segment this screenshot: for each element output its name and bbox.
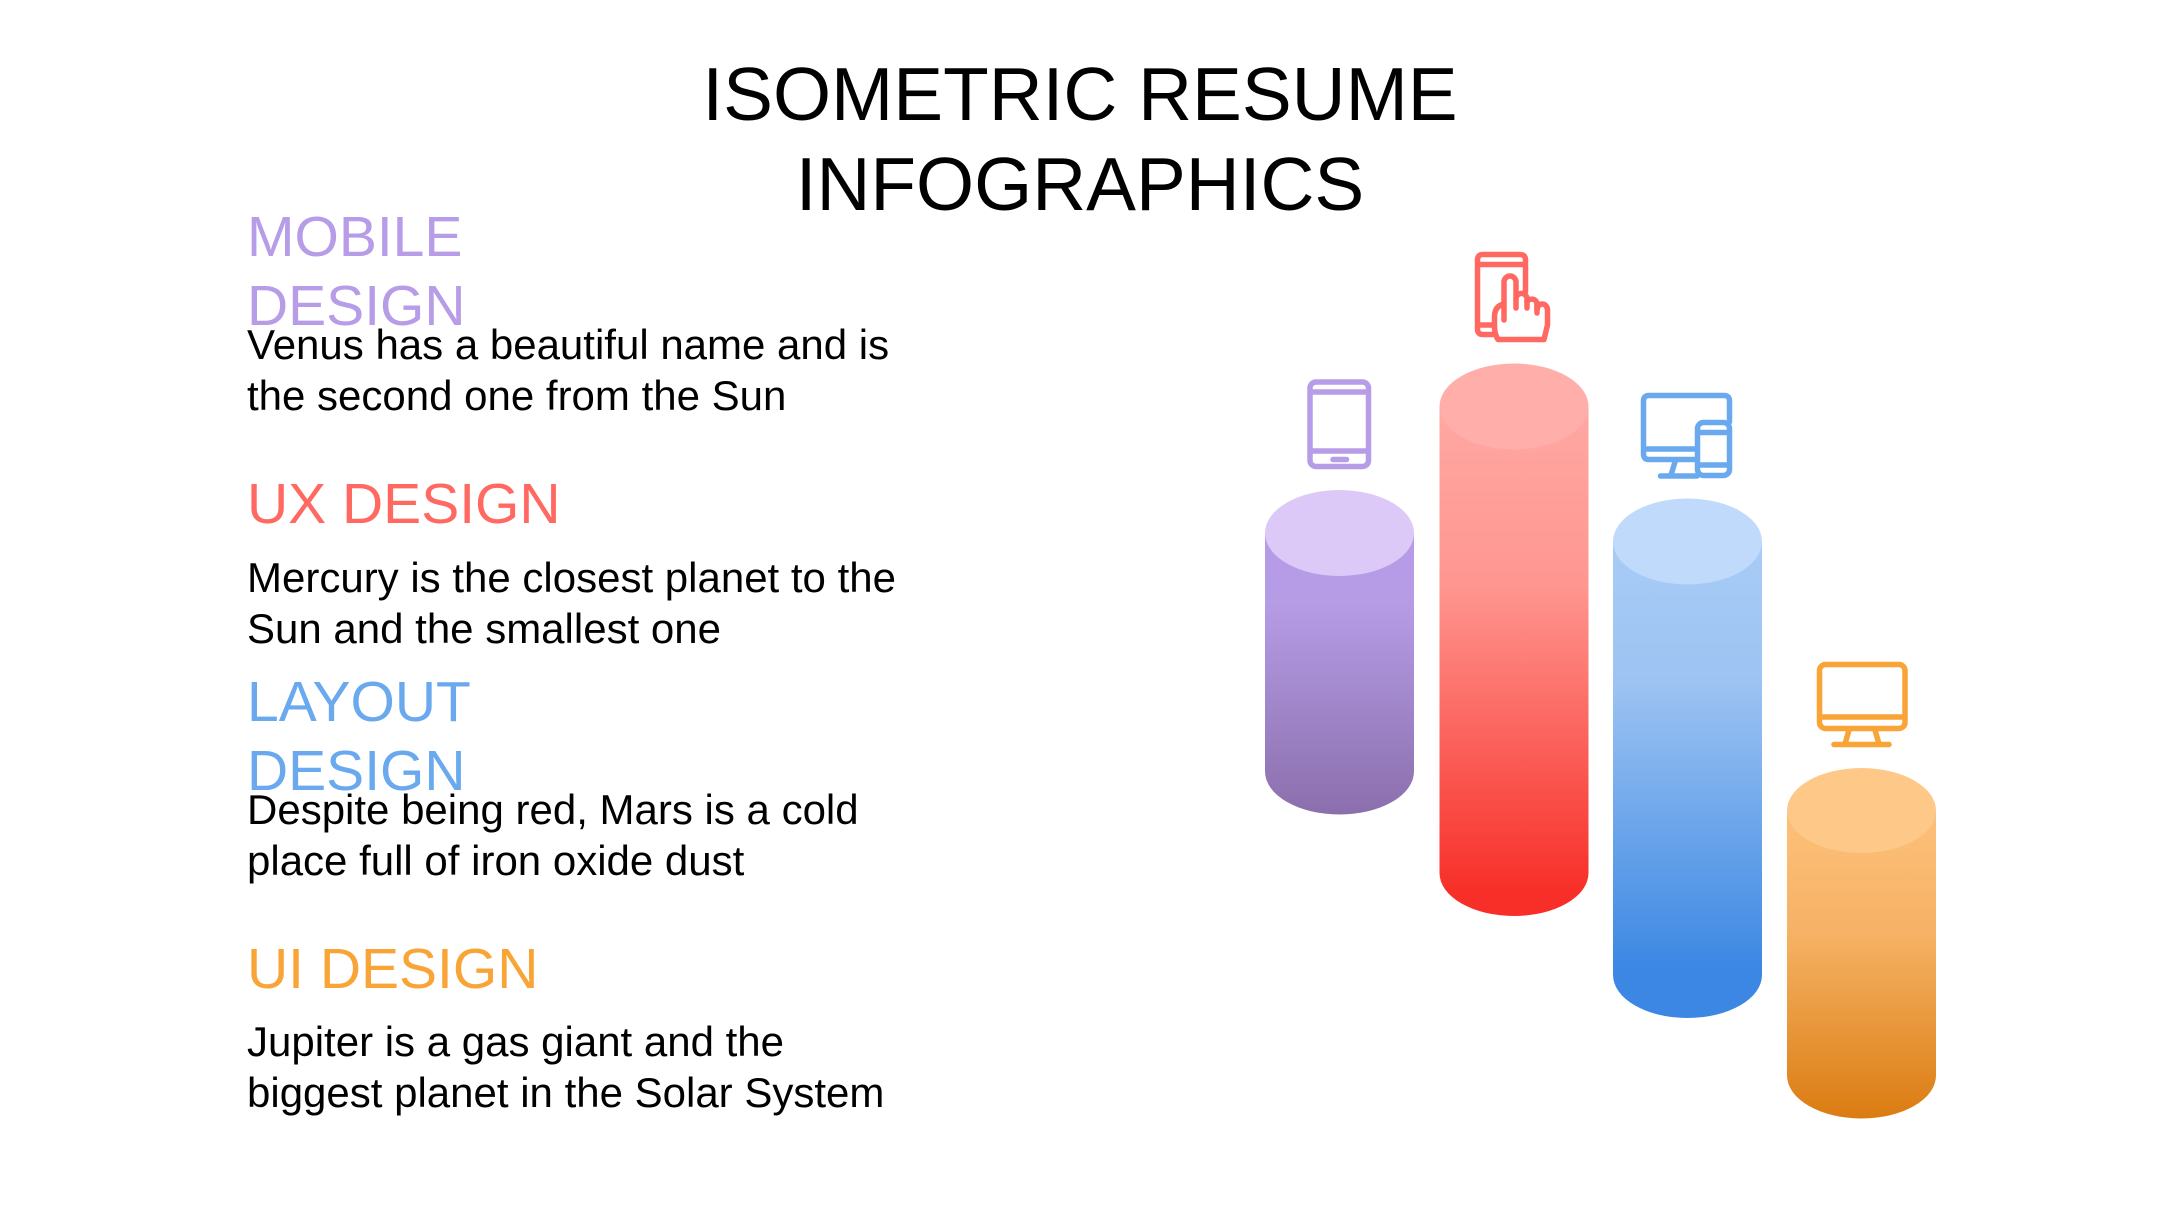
text: mobile design description: [247, 321, 889, 419]
icon: monitor and tablet: [1644, 396, 1730, 476]
cylinder: blue: [1613, 498, 1762, 1018]
text: ux design description: Mercury is the closest planet to the: [247, 554, 896, 601]
text: layout design description: place full of iron oxide dust: [247, 837, 744, 884]
heading: layout design: DESIGN: [247, 739, 466, 803]
text: ui design description: [247, 1018, 884, 1116]
heading: layout design: [247, 670, 471, 803]
heading: layout design: LAYOUT: [247, 670, 471, 734]
cylinder: orange: [1787, 768, 1936, 1118]
text: ux design description: [247, 554, 896, 652]
icon: smartphone: [1310, 382, 1368, 466]
text: mobile design description: the second one from the Sun: [247, 372, 786, 419]
text: layout design description: Despite being red, Mars is a cold: [247, 786, 859, 833]
text: layout design description: [247, 786, 859, 884]
icon: desktop monitor: [1820, 664, 1905, 744]
heading: ui design: UI DESIGN: [247, 937, 538, 1001]
cylinder: red: [1440, 364, 1588, 916]
text: mobile design description: Venus has a beautiful name and is: [247, 321, 889, 368]
cylinder: purple: [1265, 490, 1414, 814]
heading: mobile design: [247, 205, 466, 338]
heading: mobile design: MOBILE: [247, 205, 462, 269]
text: ui design description: Jupiter is a gas giant and the: [247, 1018, 784, 1065]
title: INFOGRAPHICS: [796, 142, 1364, 226]
icon: phone with touching hand: [1478, 254, 1548, 340]
heading: ux design: UX DESIGN: [247, 472, 561, 536]
text: ui design description: biggest planet in the Solar System: [247, 1069, 884, 1116]
title: [702, 52, 1458, 226]
heading: mobile design: DESIGN: [247, 274, 466, 338]
text: ux design description: Sun and the smallest one: [247, 605, 721, 652]
title: ISOMETRIC RESUME: [702, 52, 1458, 136]
